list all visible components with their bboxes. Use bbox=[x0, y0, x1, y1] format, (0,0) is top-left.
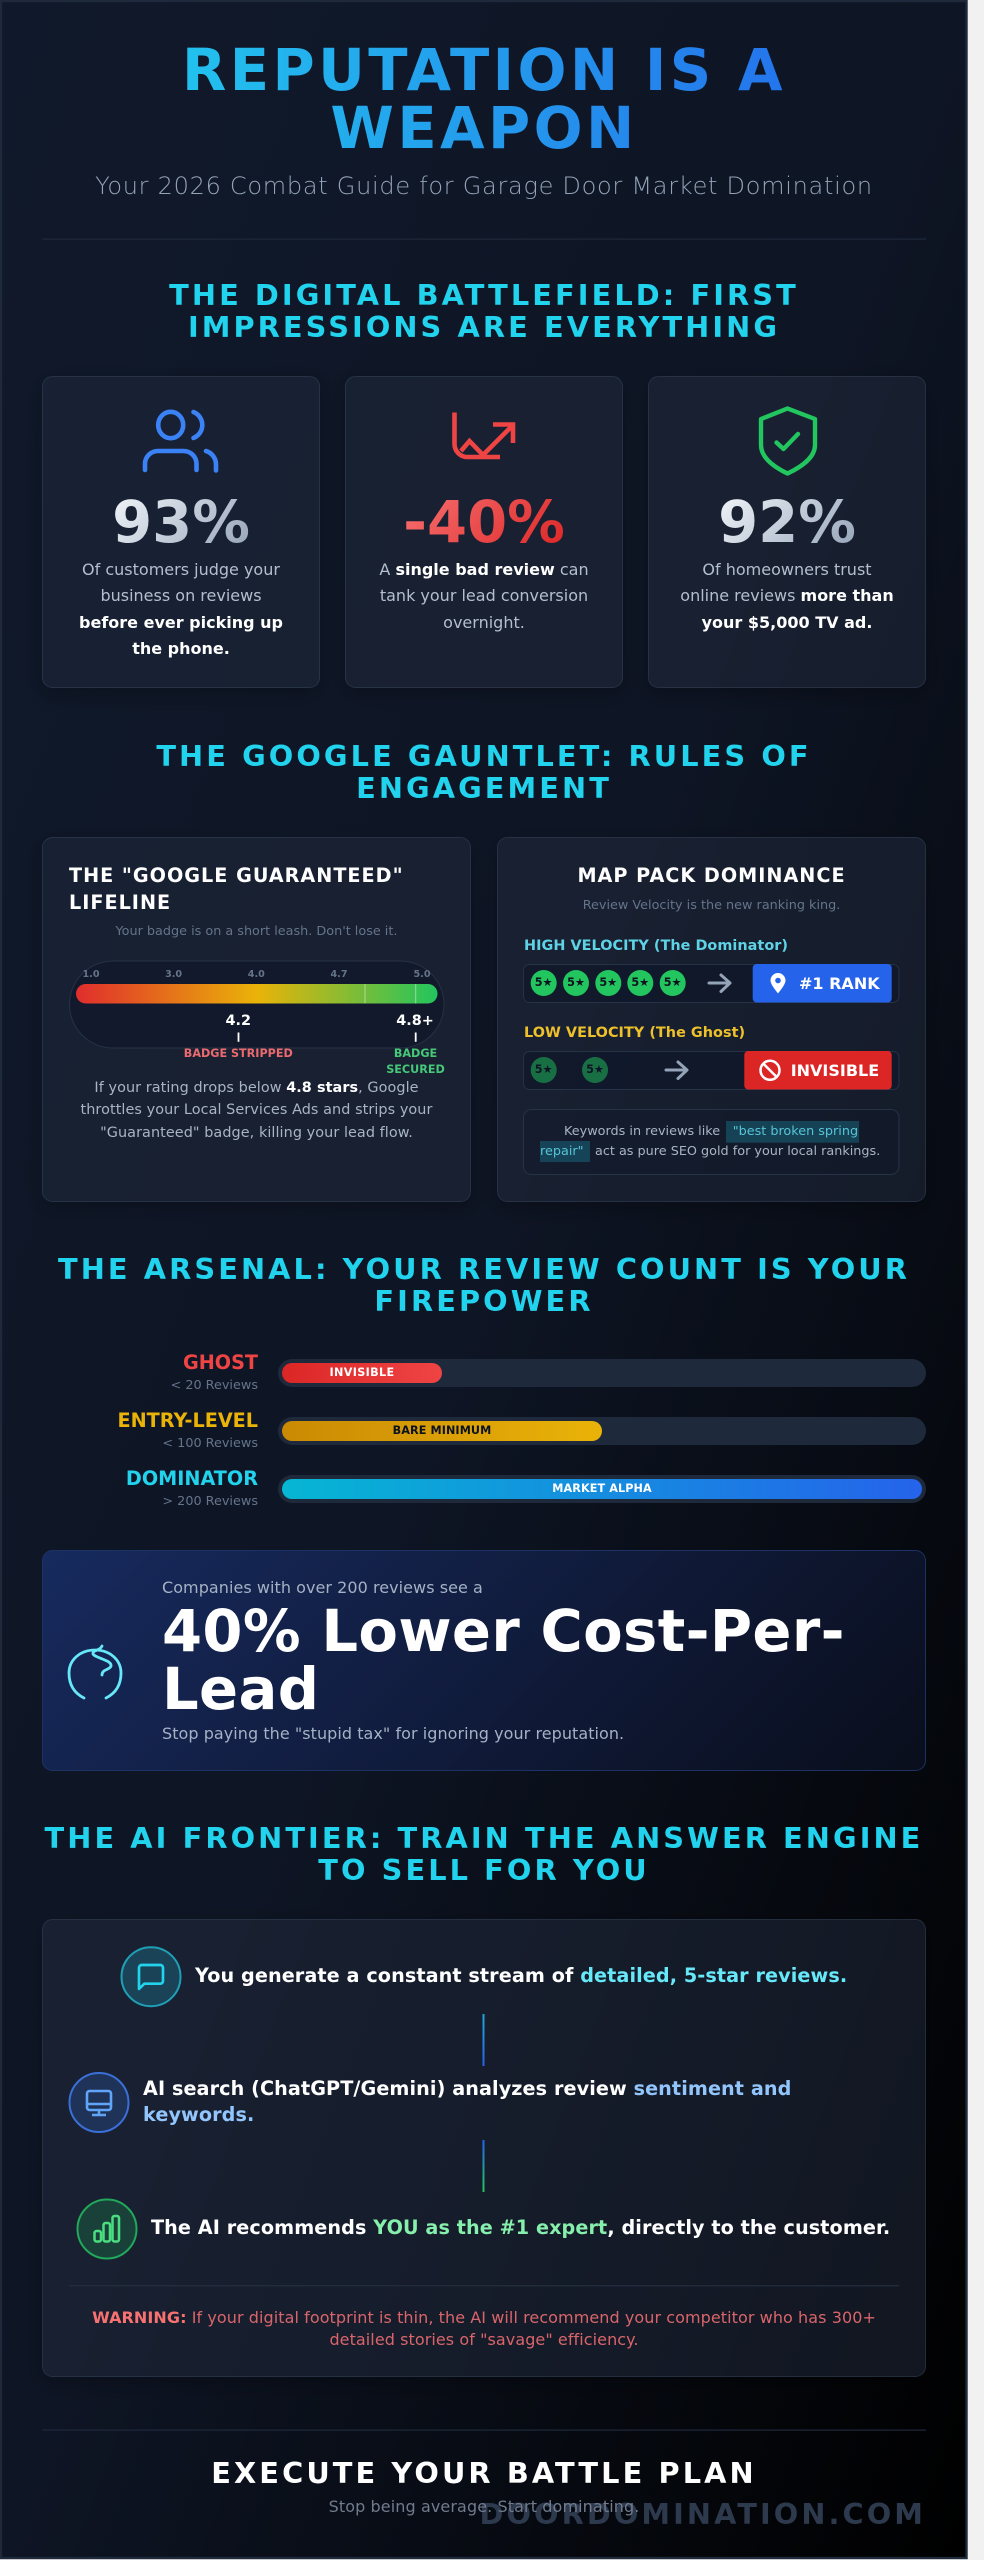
stat text: business on reviews bbox=[100, 586, 262, 605]
heading: the arsenal: THE ARSENAL: YOUR REVIEW COUNT IS YOUR bbox=[58, 1252, 910, 1286]
heading: the ai frontier bbox=[42, 1822, 926, 1886]
paragraph: If your rating drops below 4.8 stars, Google bbox=[94, 1080, 419, 1096]
stat text: Of homeowners trust bbox=[702, 560, 872, 579]
title: REPUTATION IS A bbox=[182, 37, 786, 104]
icon: shield check bbox=[761, 408, 815, 474]
heading: the ai frontier: THE AI FRONTIER: TRAIN THE ANSWER ENGINE bbox=[45, 1821, 923, 1855]
callout: lower cost-per-lead bbox=[42, 1550, 926, 1770]
stat text: tank your lead conversion bbox=[380, 586, 588, 605]
stat value: 92% bbox=[718, 489, 856, 556]
stat text: Of customers judge your bbox=[82, 560, 280, 579]
tier: entry-level: < 100 Reviews bbox=[162, 1436, 258, 1451]
title: WEAPON bbox=[330, 95, 638, 162]
stat text: before ever picking up bbox=[79, 613, 283, 632]
rating scale: 3.0 bbox=[165, 969, 182, 980]
panel: map pack dominance bbox=[497, 838, 926, 1202]
paragraph bbox=[42, 1076, 471, 1144]
step 3: The AI recommends YOU as the #1 expert, directly to the customer. bbox=[151, 2216, 890, 2239]
subtitle: Your 2026 Combat Guide for Garage Door Market Domination bbox=[95, 172, 873, 200]
callout lead-in: Companies with over 200 reviews see a bbox=[162, 1578, 483, 1597]
keywords note: Keywords in reviews like bbox=[564, 1124, 720, 1139]
panel: google guaranteed lifeline bbox=[42, 838, 471, 1202]
keywords note: repair" bbox=[540, 1144, 584, 1159]
panel title bbox=[69, 863, 445, 917]
footer title: EXECUTE YOUR BATTLE PLAN bbox=[211, 2456, 757, 2490]
footer subtitle: Stop being average. Start dominating. bbox=[329, 2497, 639, 2516]
low velocity row bbox=[524, 1051, 899, 1090]
panel title: LIFELINE bbox=[69, 891, 171, 914]
step 2 bbox=[70, 2073, 903, 2132]
high velocity row: 5★ bbox=[567, 976, 585, 989]
panel: -40% stat bbox=[345, 376, 623, 688]
panel subtitle: Review Velocity is the new ranking king. bbox=[583, 898, 840, 913]
low velocity row: 5★ bbox=[535, 1063, 553, 1076]
heading: the ai frontier: TO SELL FOR YOU bbox=[318, 1853, 650, 1887]
tier: entry-level bbox=[60, 1409, 926, 1452]
step 2: keywords. bbox=[143, 2103, 254, 2126]
panel title: MAP PACK DOMINANCE bbox=[577, 864, 846, 887]
footer bbox=[42, 2457, 940, 2530]
rank badge: #1 RANK bbox=[799, 974, 880, 993]
rating scale: 4.7 bbox=[330, 969, 348, 980]
rating scale: 5.0 bbox=[414, 969, 430, 980]
rating scale bbox=[70, 961, 456, 1079]
rating scale: 4.0 bbox=[248, 969, 265, 980]
heading: google gauntlet: ENGAGEMENT bbox=[356, 771, 612, 805]
keywords note: act as pure SEO gold for your local rankings. bbox=[595, 1144, 880, 1159]
keywords note bbox=[524, 1110, 899, 1174]
rank badge bbox=[753, 964, 892, 1002]
watermark: DOORDOMINATION.COM bbox=[480, 2497, 926, 2531]
stat text bbox=[345, 557, 623, 637]
paragraph: throttles your Local Services Ads and strips your bbox=[81, 1102, 432, 1118]
tier: dominator bbox=[60, 1467, 926, 1510]
marker: 4.2 badge stripped: 4.2 bbox=[226, 1013, 251, 1029]
tier: entry-level: ENTRY-LEVEL bbox=[117, 1409, 258, 1432]
icon: users bbox=[145, 412, 216, 470]
icon: chart with arrow bbox=[454, 412, 513, 457]
step 3 bbox=[78, 2200, 911, 2258]
header bbox=[42, 42, 926, 201]
panel: 93% stat bbox=[42, 376, 320, 688]
heading: digital battlefield bbox=[42, 279, 926, 343]
high velocity row: 5★ bbox=[599, 976, 617, 989]
tier: ghost: < 20 Reviews bbox=[171, 1378, 258, 1393]
step 1: You generate a constant stream of detailed, 5-star reviews. bbox=[195, 1964, 847, 1987]
stat value: 93% bbox=[112, 489, 250, 556]
heading: digital battlefield: IMPRESSIONS ARE EVERYTHING bbox=[188, 310, 780, 344]
step 2: AI search (ChatGPT/Gemini) analyzes review sentiment and bbox=[143, 2077, 791, 2100]
invisible badge: INVISIBLE bbox=[791, 1061, 879, 1080]
paragraph: "Guaranteed" badge, killing your lead flow. bbox=[100, 1124, 413, 1140]
tier: ghost: GHOST bbox=[183, 1351, 258, 1374]
stat text: A single bad review can bbox=[379, 560, 589, 579]
stat text bbox=[42, 557, 320, 663]
high velocity row bbox=[524, 964, 899, 1002]
stat text bbox=[648, 557, 926, 637]
marker: 4.2 badge stripped: BADGE STRIPPED bbox=[184, 1047, 293, 1060]
high velocity label: HIGH VELOCITY (The Dominator) bbox=[524, 938, 788, 954]
panel: ai flow bbox=[42, 1920, 926, 2376]
high velocity row: 5★ bbox=[535, 976, 553, 989]
marker: 4.2 badge stripped bbox=[168, 1010, 308, 1062]
marker: 4.8+ badge secured: BADGE bbox=[394, 1047, 437, 1060]
tier: ghost bbox=[60, 1351, 926, 1394]
keywords note: "best broken spring bbox=[733, 1124, 858, 1139]
callout figure bbox=[162, 1603, 912, 1719]
panel subtitle: Your badge is on a short leash. Don't lose it. bbox=[116, 924, 397, 939]
warning bbox=[42, 2307, 926, 2353]
heading: google gauntlet bbox=[42, 740, 926, 804]
tier: dominator: MARKET ALPHA bbox=[552, 1482, 652, 1495]
tier: dominator: > 200 Reviews bbox=[162, 1494, 258, 1509]
tier: ghost: INVISIBLE bbox=[329, 1366, 394, 1379]
panel title: THE "GOOGLE GUARANTEED" bbox=[69, 864, 404, 887]
tier: dominator: DOMINATOR bbox=[126, 1467, 258, 1490]
icon: circular arrow bbox=[69, 1646, 121, 1698]
heading: the arsenal bbox=[42, 1253, 926, 1317]
marker: 4.8+ badge secured: SECURED bbox=[386, 1063, 445, 1076]
heading: digital battlefield: THE DIGITAL BATTLEFIELD: FIRST bbox=[169, 278, 799, 312]
invisible badge bbox=[744, 1051, 892, 1090]
heading: google gauntlet: THE GOOGLE GAUNTLET: RULES OF bbox=[156, 739, 812, 773]
arrow bbox=[709, 975, 730, 992]
panel: 92% stat bbox=[648, 376, 926, 688]
stat text: overnight. bbox=[443, 613, 525, 632]
warning: detailed stories of "savage" efficiency. bbox=[329, 2330, 639, 2349]
stat text: the phone. bbox=[132, 639, 230, 658]
high velocity row: 5★ bbox=[664, 976, 682, 989]
tier: entry-level: BARE MINIMUM bbox=[393, 1424, 491, 1437]
high velocity row: 5★ bbox=[631, 976, 649, 989]
title bbox=[42, 42, 926, 158]
marker: 4.8+ badge secured: 4.8+ bbox=[396, 1013, 434, 1029]
stat value: -40% bbox=[403, 489, 565, 556]
callout note: Stop paying the "stupid tax" for ignoring your reputation. bbox=[162, 1724, 624, 1742]
callout figure: Lead bbox=[162, 1656, 319, 1723]
warning: WARNING: If your digital footprint is thin, the AI will recommend your competitor who has 300+ bbox=[92, 2308, 876, 2327]
low velocity row: 5★ bbox=[586, 1063, 604, 1076]
bar chart: review count tiers bbox=[60, 1351, 926, 1510]
heading: the arsenal: FIREPOWER bbox=[374, 1284, 594, 1318]
rating scale: 1.0 bbox=[82, 969, 100, 980]
stat text: your $5,000 TV ad. bbox=[702, 613, 872, 632]
low velocity label: LOW VELOCITY (The Ghost) bbox=[524, 1025, 745, 1041]
callout figure: 40% Lower Cost-Per- bbox=[162, 1598, 845, 1665]
stat text: online reviews more than bbox=[680, 586, 894, 605]
marker: 4.8+ badge secured bbox=[376, 1010, 456, 1079]
arrow bbox=[666, 1062, 687, 1078]
step 1 bbox=[122, 1947, 915, 2006]
